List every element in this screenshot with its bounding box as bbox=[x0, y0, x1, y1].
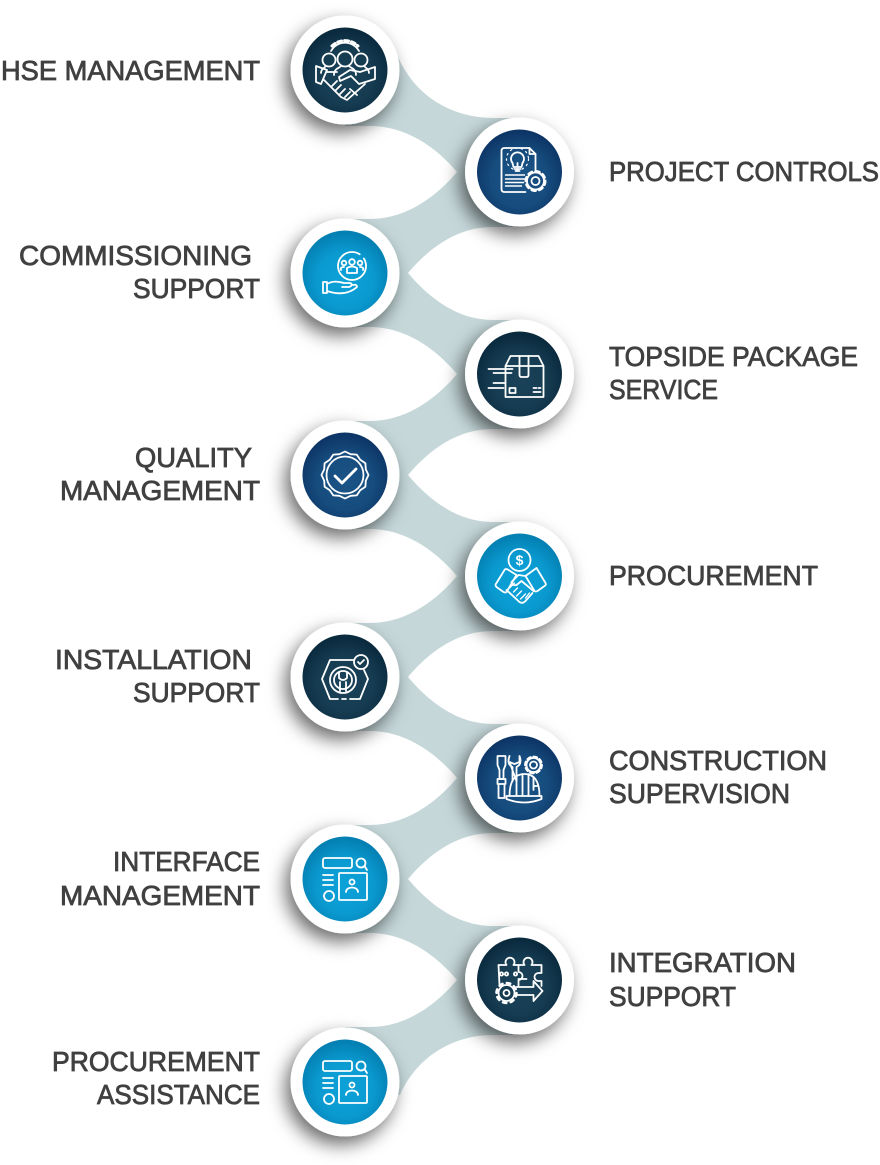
label: quality management bbox=[60, 442, 260, 506]
icon: moving parcel box bbox=[488, 356, 544, 397]
icon: hex nut with wrench bbox=[322, 655, 368, 699]
node: HSE management bbox=[290, 16, 400, 124]
connecting ribbon bbox=[345, 57, 519, 1095]
node: construction supervision bbox=[465, 724, 574, 832]
icon: hand holding group of people bbox=[323, 252, 366, 293]
icon: puzzle, gear and arrow bbox=[496, 958, 542, 1003]
icon: tools, gear and hard hat bbox=[498, 756, 542, 802]
label: installation support bbox=[55, 644, 260, 708]
label: construction supervision: CONSTRUCTION bbox=[609, 745, 827, 776]
label: commissioning support bbox=[19, 240, 260, 304]
label: integration support bbox=[609, 947, 796, 1012]
label: installation support: INSTALLATION bbox=[55, 644, 252, 675]
label: integration support: INTEGRATION bbox=[609, 947, 796, 978]
label: interface management: MANAGEMENT bbox=[60, 880, 260, 911]
label: procurement assistance: PROCUREMENT bbox=[52, 1046, 260, 1077]
label: installation support: SUPPORT bbox=[133, 677, 260, 708]
label: quality management: QUALITY bbox=[135, 442, 252, 473]
node: commissioning support bbox=[290, 218, 400, 328]
node: procurement bbox=[465, 522, 574, 630]
label: quality management: MANAGEMENT bbox=[60, 475, 260, 506]
label: procurement assistance: ASSISTANCE bbox=[97, 1079, 260, 1110]
label: commissioning support: SUPPORT bbox=[133, 273, 260, 304]
node: integration support bbox=[465, 926, 574, 1034]
label: topside package service: TOPSIDE PACKAGE bbox=[609, 341, 858, 372]
label: construction supervision: SUPERVISION bbox=[609, 778, 790, 809]
node: procurement assistance bbox=[290, 1028, 400, 1136]
label: topside package service: SERVICE bbox=[609, 374, 718, 405]
node: interface management bbox=[290, 824, 400, 934]
node: project controls bbox=[465, 118, 574, 226]
label: commissioning support: COMMISSIONING bbox=[19, 240, 252, 271]
node: installation support bbox=[290, 622, 400, 732]
label: topside package service bbox=[609, 341, 858, 405]
node: topside package service bbox=[465, 320, 574, 428]
icon: gear, people and handshake bbox=[316, 41, 375, 100]
label: interface management: INTERFACE bbox=[113, 846, 260, 877]
node: quality management bbox=[290, 420, 400, 530]
label: procurement assistance bbox=[52, 1046, 260, 1110]
label: interface management bbox=[60, 846, 260, 911]
label: construction supervision bbox=[609, 745, 827, 809]
icon: interface profile layout bbox=[323, 858, 367, 901]
icon: document with bulb and gear bbox=[502, 148, 545, 192]
icon: interface profile layout bbox=[323, 1061, 367, 1104]
label: HSE management: HSE MANAGEMENT bbox=[1, 55, 260, 86]
icon: quality badge with check bbox=[322, 452, 368, 498]
label: procurement: PROCUREMENT bbox=[609, 560, 818, 591]
icon: coin and handshake: $ bbox=[516, 552, 524, 568]
label: integration support: SUPPORT bbox=[609, 981, 736, 1012]
